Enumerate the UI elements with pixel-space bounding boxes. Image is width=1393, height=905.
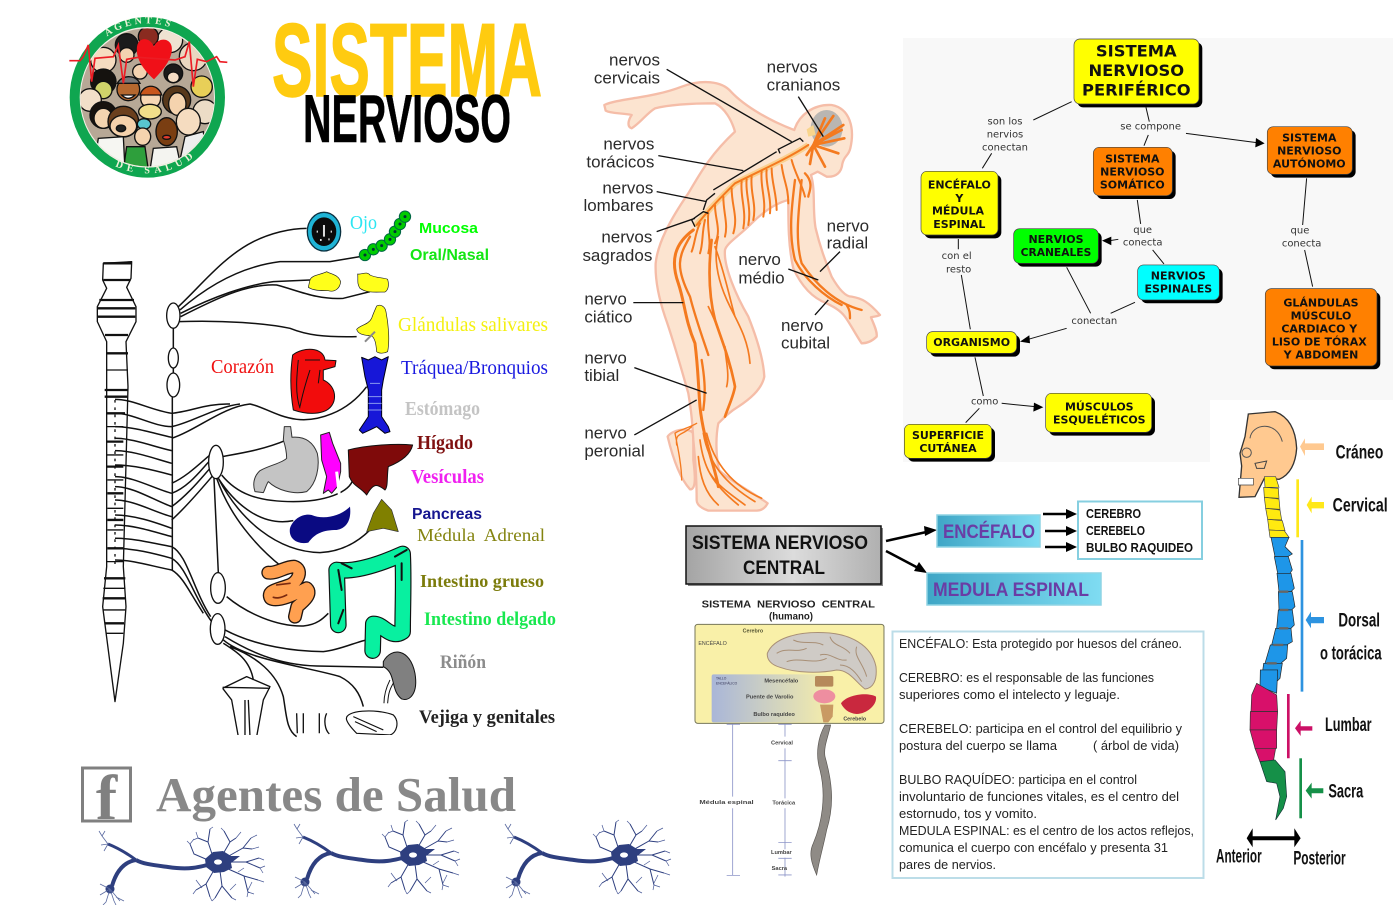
spinal cord drawing [811,725,832,875]
text frame [892,632,1204,878]
lumbar bar [1284,694,1292,758]
spine labels [1216,443,1388,869]
box: Organismo: ORGANISMO [933,336,1010,349]
vertebral discs [1252,592,1288,747]
heartbeat line [69,42,227,87]
definitions: postura del cuerpo se llama [899,739,1057,753]
spinal cord column [97,262,136,702]
arrows from central box [886,514,1072,570]
nerve labels: nervos [609,51,660,70]
definitions: pares de nervios. [899,858,996,872]
label: Corazon: Corazón [211,356,274,378]
figure title [702,599,875,622]
nerve labels: cubital [781,333,830,352]
spine labels: Anterior [1216,847,1262,868]
box: Medula espinal: MEDULA ESPINAL [933,580,1089,601]
box: Sistema Nervioso Central: SISTEMA NERVIOSO [692,533,868,554]
nerve labels: nervo [584,348,627,367]
box: Musculos esqueleticos: MÚSCULOS [1065,401,1134,414]
label: Higado: Hígado [417,432,473,454]
box: Sistema Nervioso Periferico: SISTEMA [1096,42,1177,61]
label: Mucosa: Mucosa [419,220,479,237]
nerve labels: nervo [781,316,823,335]
connector labels [942,116,1321,407]
icon: gallbladder [321,432,341,495]
neuron 3 [505,820,671,898]
icon: heart organ [291,349,336,413]
definitions: BULBO RAQUÍDEO: participa en el control [899,772,1137,787]
arrow: cervical [1307,497,1324,513]
icon: eye [307,212,341,251]
connector labels: con el [942,251,972,262]
icon: neurons row [99,820,671,905]
panel: peripheral nervous system concept map [903,38,1393,462]
box: Encefalo: ENCÉFALO [943,521,1035,543]
nerve labels [582,51,869,461]
skull detail [807,125,816,137]
nerve labels: nervos [767,57,818,76]
connector labels: conectan [1071,316,1117,327]
spine labels: Posterior [1293,848,1346,869]
icon: bladder and genitals [223,677,397,737]
definitions: CEREBRO: es el responsable de las funciones [899,671,1154,685]
icon: adrenal gland [367,499,398,532]
box: Encefalo y medula espinal: Y [954,192,964,205]
arrowheads [914,509,1077,573]
icon: trachea and bronchi [359,357,390,433]
map connectors [958,102,1313,423]
label: Vesiculas: Vesículas [411,466,484,488]
panel: body nerves figure [582,51,880,511]
arrow: sacral [1306,783,1323,799]
nerve labels: nervo [584,423,627,442]
label: Ojo: Ojo [350,212,377,234]
box: Medula espinal [927,573,1101,605]
box: encephalon parts: CEREBRO [1086,507,1141,521]
box: Encefalo y medula espinal: MÉDULA [932,205,984,218]
brainstem panel [712,674,837,722]
icon: kidney [383,652,416,703]
logo lettering: DE SALUD [115,154,192,174]
body silhouette [604,82,880,511]
box: Nervios craneales: NERVIOS [1028,233,1084,246]
box: Superficie cutanea: SUPERFICIE [912,429,984,442]
nerve labels: nervo [738,250,781,269]
label: Oral/Nasal: Oral/Nasal [410,247,489,264]
title [272,3,542,157]
box: Musculos esqueleticos: ESQUELÉTICOS [1053,414,1146,427]
map arrowheads [1020,138,1265,412]
nerve labels: cervicais [594,68,660,87]
figure labels: Lumbar [771,850,793,856]
figure title: SISTEMA NERVIOSO CENTRAL [702,599,875,610]
map background [903,38,1393,462]
icon: stomach [254,427,318,493]
box: Encefalo y medula espinal: ENCÉFALO [928,179,991,192]
figure labels: Cerebro [743,629,764,635]
cartoon crowd of faces [77,27,220,170]
facebook link [82,762,516,833]
box: Nervios espinales [1138,265,1223,303]
nerve labels: nervos [603,134,654,153]
icon: large intestine [337,550,407,651]
title word: SISTEMA: SISTEMA [272,3,542,119]
panel: spine figure [1210,400,1393,890]
ganglia chain [167,303,225,644]
box: Glandulas y musculo: GLÁNDULAS [1283,297,1359,310]
label: Rinon: Riñón [440,652,486,673]
figure labels: Médula espinal [699,800,754,806]
definitions: estornudo, tos y vomito. [899,807,1037,821]
icon: mucosa [359,211,411,261]
nerve labels: radial [827,233,868,252]
box: Glandulas y musculo: Y ABDOMEN [1283,349,1358,362]
organ labels [211,212,556,728]
definitions: ENCÉFALO: Esta protegido por huesos del cráneo. [899,636,1182,651]
figure labels: ENCÉFALO [698,640,727,647]
box: Nervios craneales [1014,229,1102,267]
midbrain [815,676,833,687]
nerve labels: nervo [827,217,869,236]
figure labels: Bulbo raquídeo [753,712,795,718]
figure labels: ENCEFÁLICO [716,681,738,685]
title word: NERVIOSO: NERVIOSO [303,81,511,157]
box: Encefalo y medula espinal: ESPINAL [933,218,985,231]
box: Sistema Nervioso Autonomo: SISTEMA [1282,131,1337,144]
nerve labels: nervos [601,227,652,246]
box: Encefalo y medula espinal [921,171,1001,238]
label: Pancreas: Pancreas [412,506,482,523]
panel: central nervous system figure [695,599,884,877]
label: Glandulas salivares: Glándulas salivares [398,314,548,336]
box: Sistema Nervioso Autonomo: AUTÓNOMO [1273,157,1346,170]
figure labels: Cerebelo [843,717,867,723]
box: Encefalo [937,515,1040,547]
nerve pathways [115,228,383,737]
icon: facebook: f [96,762,118,833]
box: Glandulas y musculo: MÚSCULO [1291,310,1351,323]
spine background [1210,400,1393,890]
nerve labels: tibial [584,366,619,385]
box: Glandulas y musculo: LISO DE TÓRAX [1272,336,1367,349]
definitions [899,636,1194,872]
pons [813,689,835,703]
cervical vertebrae [1264,477,1289,537]
lumbar vertebrae [1250,683,1278,762]
box: Sistema Nervioso Periferico: NERVIOSO [1088,61,1184,80]
nerve labels: sagrados [582,246,652,265]
orange nerves [674,116,862,505]
nerve labels: cranianos [767,76,840,95]
cerebellum [841,694,876,714]
box: Sistema Nervioso Central [686,526,883,586]
connector labels: conecta [1123,238,1162,249]
definitions: superiores como el intelecto y leguaje. [899,688,1120,702]
brain panel [695,624,884,723]
box: Sistema Nervioso Somatico: SOMÁTICO [1100,179,1165,192]
definitions: comunica el cuerpo con encéfalo y presenta 31 [899,841,1168,855]
label: Traquea/Bronquios: Tráquea/Bronquios [401,357,548,379]
definitions: CEREBELO: participa en el control del equilibrio y [899,722,1183,736]
connector labels: se compone [1120,121,1181,132]
connector labels: son los [988,116,1022,127]
box: Superficie cutanea [904,424,995,462]
brain [767,633,876,689]
nerve labels: médio [738,268,785,287]
nerve labels: nervo [584,289,627,308]
connector labels: que [1133,225,1152,236]
nerve labels: nervos [602,178,653,197]
dorsal vertebrae [1260,537,1295,693]
logo: Agentes de Salud [69,16,228,178]
box: Nervios espinales: ESPINALES [1144,283,1212,296]
connector labels: que [1291,226,1309,237]
diagram drawing [97,211,416,737]
box: Sistema Nervioso Autonomo: NERVIOSO [1277,144,1341,157]
label: Medula Adrenal: Médula Adrenal [417,525,545,545]
figure title: (humano) [769,611,813,622]
definitions: involuntario de funciones vitales, es el centro del [899,790,1179,804]
leader lines [633,69,840,435]
figure labels: TALLO [716,676,727,680]
neuron 1 [99,827,265,905]
label: Estomago: Estómago [405,398,480,420]
logo lettering [106,16,192,174]
heart [137,39,172,79]
connector labels: nervios [987,129,1023,140]
nerve labels: peronial [584,442,645,461]
icon: small intestine [268,567,309,617]
arrow: lumbar [1295,721,1312,736]
figure labels: Puente de Varolio [746,694,794,700]
spine labels: Sacra [1328,781,1363,802]
box: Sistema Nervioso Somatico: NERVIOSO [1100,166,1164,179]
measure lines [727,724,792,877]
nerve labels: lombares [583,196,653,215]
sacral bar [1297,758,1305,818]
sacrum [1260,760,1287,820]
arrow: dorsal [1306,612,1324,628]
box: encephalon parts: CEREBELO [1086,524,1145,538]
spinal cord [695,145,808,227]
region bars [1294,479,1302,537]
page name: Agentes de Salud [156,767,516,822]
panel: autonomic nervous system diagram [97,211,556,737]
box: Organismo [927,332,1020,357]
figure labels: Cervical [771,740,793,746]
medulla [820,705,833,722]
skull [1238,412,1297,497]
box: Sistema Nervioso Periferico: PERIFÉRICO [1082,80,1191,99]
connector labels: conecta [1282,239,1321,250]
definitions: ( árbol de vida) [1093,739,1179,753]
brain [811,110,843,147]
box: Sistema Nervioso Somatico [1093,147,1176,199]
label: Intestino grueso: Intestino grueso [420,571,544,591]
box: Superficie cutanea: CUTÁNEA [919,442,977,455]
figure labels: Sacra [772,866,788,872]
connector labels: como [971,396,998,407]
box: Sistema Nervioso Central: CENTRAL [743,558,825,579]
panel: definitions text [892,632,1204,878]
panel: central nervous system flow [686,502,1202,605]
label: Vejiga y genitales: Vejiga y genitales [419,707,555,728]
nerve labels: ciático [584,308,632,327]
icon: facebook [82,762,130,833]
box: Sistema Nervioso Periferico [1074,39,1202,107]
arrow: cranium [1300,438,1324,456]
box: Sistema Nervioso Somatico: SISTEMA [1105,153,1160,166]
logo lettering: AGENTES [106,16,171,36]
icon: pancreas [290,507,350,543]
box: Nervios espinales: NERVIOS [1151,270,1206,283]
icon: salivary glands [308,272,389,353]
dorsal bar [1298,540,1306,692]
icon: liver [348,444,413,495]
connector labels: resto [946,264,971,275]
figure labels: Torácica [772,801,796,807]
definitions: MEDULA ESPINAL: es el centro de los actos reflejos, [899,824,1194,838]
figure labels [698,629,867,872]
neuron 2 [294,820,460,898]
box: encephalon parts: BULBO RAQUIDEO [1086,541,1193,555]
figure labels: Mesencéfalo [764,679,799,685]
nerve labels: torácicos [586,152,654,171]
box: Glandulas y musculo: CARDIACO Y [1281,323,1358,336]
connector labels: conectan [982,142,1028,153]
box: Musculos esqueleticos [1046,393,1155,436]
label: Intestino delgado: Intestino delgado [424,609,556,630]
logo ring [75,22,220,173]
box: encephalon parts [1078,502,1202,559]
box: Nervios craneales: CRANEALES [1021,246,1091,259]
box: Glandulas y musculo [1265,289,1380,369]
box: Sistema Nervioso Autonomo [1267,127,1356,178]
arrow: anterior posterior [1247,828,1301,847]
